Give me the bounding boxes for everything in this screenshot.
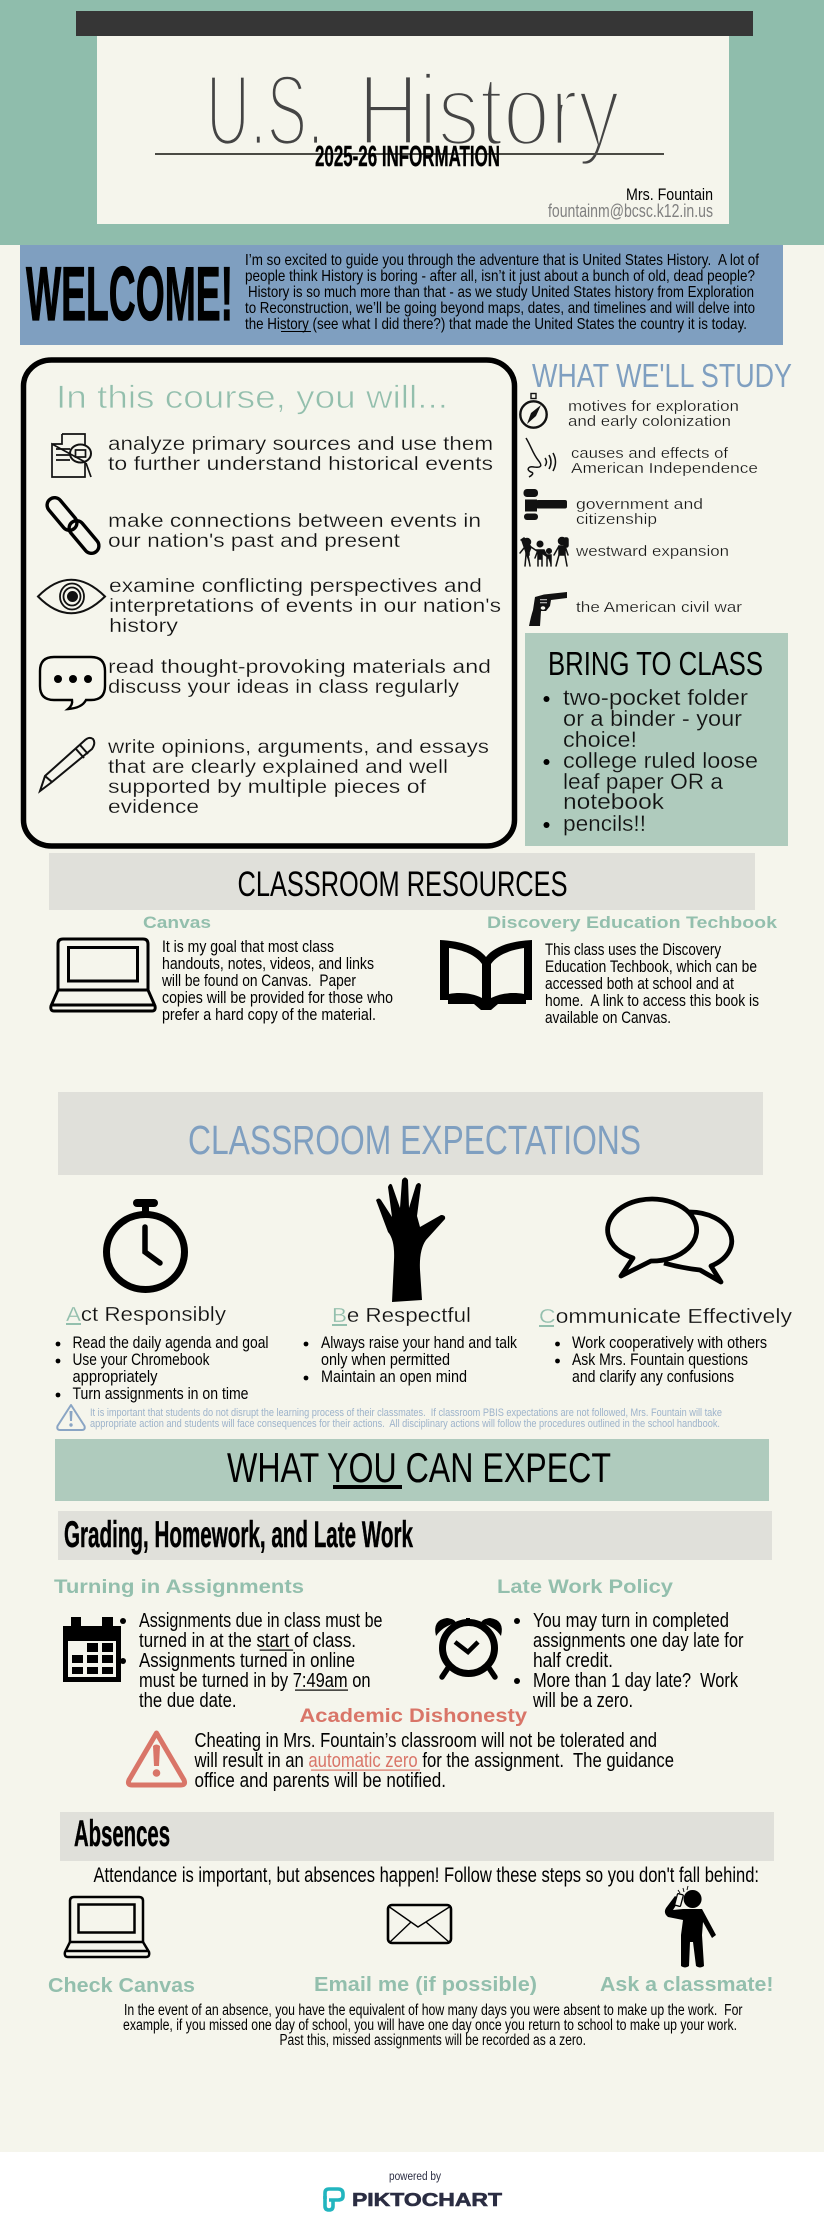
icon: nose and sound waves (526, 438, 556, 477)
text: exploration (568, 399, 739, 430)
text: government (576, 497, 703, 528)
column: communicate effectively (539, 1305, 793, 1386)
supplies list: choice! (563, 727, 637, 752)
icon: calendar (63, 1617, 121, 1682)
column: communicate effectively: Work cooperatively with others (572, 1333, 767, 1352)
column: communicate effectively: Ask Mrs. Fountain questions (572, 1350, 748, 1369)
canvas text: It is my goal that most class (162, 937, 334, 956)
column: be respectful: only when permitted (321, 1350, 450, 1369)
icon: envelope (388, 1905, 451, 1943)
text: connections: our nation's past and present (108, 531, 401, 552)
column: be respectful: Maintain an open mind (321, 1367, 467, 1386)
icon: piktochart logo (325, 2189, 343, 2210)
turning in text: Assignments due in class must be (139, 1610, 382, 1632)
techbook text: Education Techbook, which can be (545, 957, 757, 976)
icon: alarm clock (435, 1618, 502, 1677)
step: check canvas: Check Canvas (48, 1975, 195, 1997)
section: classroom expectations (56, 1092, 793, 1430)
text: perspectives: interpretations of events in our nation's (109, 596, 501, 617)
supplies list: or a binder - your (563, 706, 742, 731)
text: analyze: to further understand historical events (108, 454, 493, 475)
footer (0, 2152, 824, 2232)
late work text: half credit. (533, 1650, 613, 1672)
academic dishonesty heading: Academic Dishonesty (300, 1706, 527, 1727)
welcome panel (20, 245, 783, 345)
make-up policy text (123, 2002, 742, 2049)
column: communicate effectively: and clarify any confusions (572, 1367, 734, 1386)
title: History (358, 55, 620, 167)
dishonesty text: Cheating in Mrs. Fountain’s classroom will not be tolerated and (194, 1730, 657, 1752)
column: act responsibly: appropriately (72, 1367, 158, 1386)
welcome paragraph (245, 252, 759, 333)
header banner (0, 0, 824, 245)
text: discuss: read thought-provoking materials and (108, 657, 491, 678)
text: perspectives (109, 576, 501, 637)
discovery subheading: Discovery Education Techbook (487, 913, 778, 932)
text: connections: make connections between events in (108, 511, 481, 532)
panel: bring to class (525, 633, 788, 846)
text: connections (108, 511, 481, 552)
icon: document with magnifier (52, 434, 91, 477)
icon: open book (440, 940, 532, 1010)
panel: what we'll study (520, 357, 792, 626)
text: westward: westward expansion (575, 544, 729, 560)
turning in subheading: Turning in Assignments (54, 1577, 304, 1598)
section: classroom resources (49, 853, 778, 1027)
text: discuss (108, 657, 491, 698)
techbook text: available on Canvas. (545, 1008, 671, 1027)
heading: CLASSROOM EXPECTATIONS (188, 1117, 641, 1163)
icon: laptop (65, 1897, 149, 1957)
techbook text: This class uses the Discovery (545, 940, 721, 959)
dishonesty text (194, 1730, 674, 1792)
text: independence: American Independence (571, 461, 758, 477)
supplies list: two-pocket folder (563, 685, 748, 710)
panel heading: In this course, you will... (56, 379, 448, 415)
late work text: assignments one day late for (533, 1630, 744, 1652)
supplies list: college ruled loose (563, 748, 758, 773)
title (206, 55, 620, 167)
step: email me: Email me (if possible) (314, 1974, 537, 1996)
make-up policy text: Past this, missed assignments will be recorded as a zero. (280, 2032, 586, 2049)
heading: Absences (74, 1813, 170, 1854)
title: U.S. (206, 55, 324, 167)
icon: family of pioneers (520, 538, 568, 566)
canvas text: handouts, notes, videos, and links (162, 954, 374, 973)
canvas text: prefer a hard copy of the material. (162, 1005, 376, 1024)
text: government: government and (576, 497, 703, 513)
dishonesty text: office and parents will be notified. (194, 1770, 446, 1792)
text: civil war: the American civil war (576, 600, 742, 616)
section: grading, homework, late work (54, 1511, 772, 1792)
column: communicate effectively: Communicate Effectively (539, 1305, 793, 1328)
banner: what you can expect: WHAT YOU CAN EXPECT (227, 1444, 611, 1491)
late work text: More than 1 day late? Work (533, 1670, 739, 1692)
text: perspectives: history (109, 616, 179, 637)
text: discuss: discuss your ideas in class regularly (108, 677, 460, 698)
text: perspectives: examine conflicting perspectives and (109, 576, 482, 597)
techbook text (545, 940, 759, 1027)
column: act responsibly: Use your Chromebook (72, 1350, 210, 1369)
welcome panel: WELCOME! (26, 252, 233, 337)
text: write (107, 737, 489, 818)
text: write: write opinions, arguments, and essays (107, 737, 489, 758)
text: government: citizenship (576, 512, 657, 528)
banner: what you can expect (55, 1439, 769, 1501)
column: act responsibly: Turn assignments in on time (72, 1384, 248, 1403)
techbook text: home. A link to access this book is (545, 991, 759, 1010)
turning in text: must be turned in by 7:49am on (139, 1670, 370, 1692)
heading: BRING TO CLASS (548, 645, 763, 682)
icon: laptop (51, 939, 155, 1011)
icon: gavel (524, 489, 567, 520)
turning in text: Assignments turned in online (139, 1650, 355, 1672)
heading: CLASSROOM RESOURCES (238, 865, 568, 904)
icon: stopwatch (106, 1199, 184, 1290)
section: absences (48, 1812, 774, 2049)
subtitle: 2025-26 INFORMATION (315, 141, 500, 173)
techbook text: accessed both at school and at (545, 974, 734, 993)
icon: raised hand (376, 1178, 445, 1302)
icon: pencil (40, 738, 94, 791)
text: independence (571, 446, 758, 477)
text: write: evidence (108, 797, 199, 818)
text: analyze: analyze primary sources and use them (108, 434, 493, 455)
column: be respectful: Be Respectful (332, 1304, 471, 1327)
teacher name: Mrs. Fountain (626, 185, 713, 204)
column: be respectful (304, 1304, 517, 1386)
icon: revolver (529, 592, 567, 626)
icon: speech bubble (40, 657, 105, 709)
turning in text: turned in at the start of class. (139, 1630, 356, 1652)
icon: eye (38, 580, 105, 613)
late work text: will be a zero. (532, 1690, 633, 1712)
consequences note (90, 1407, 722, 1430)
supplies list: pencils!! (563, 811, 646, 836)
text: exploration: and early colonization (568, 414, 731, 430)
column: act responsibly (56, 1303, 268, 1403)
supplies list (544, 685, 758, 836)
late work text (514, 1610, 744, 1712)
text: write: supported by multiple pieces of (108, 777, 427, 798)
consequences note: appropriate action and students will face consequences for their actions. All disciplinary actions will follow the procedures outlined in the school handbook. (90, 1418, 720, 1430)
turning in text: the due date. (139, 1690, 236, 1712)
teacher email: fountainm@bcsc.k12.in.us (548, 201, 713, 221)
powered by: powered by (389, 2171, 441, 2183)
icon: red warning triangle (128, 1733, 185, 1785)
icon: compass (520, 394, 547, 428)
canvas text: will be found on Canvas. Paper (161, 971, 356, 990)
icon: speech bubbles (608, 1199, 732, 1282)
turning in text (120, 1610, 382, 1712)
column: be respectful: Always raise your hand and talk (321, 1333, 517, 1352)
column: act responsibly: Read the daily agenda and goal (72, 1333, 268, 1352)
panel: in this course (24, 360, 514, 846)
icon: caution triangle (57, 1405, 85, 1430)
step: ask a classmate: Ask a classmate! (600, 1974, 774, 1996)
icon: chain link (44, 495, 102, 556)
supplies list: leaf paper OR a (563, 769, 724, 794)
consequences note: It is important that students do not disrupt the learning process of their classmates. If classroom PBIS expectations are not followed, Mrs. Fountain will take (90, 1407, 722, 1419)
text: independence: causes and effects of (571, 446, 729, 462)
piktochart wordmark: PIKTOCHART (352, 2189, 503, 2210)
late work subheading: Late Work Policy (497, 1577, 673, 1598)
text: write: that are clearly explained and well (108, 757, 448, 778)
text: exploration: motives for exploration (568, 399, 739, 415)
late work text: You may turn in completed (533, 1610, 729, 1632)
canvas text (161, 937, 393, 1024)
icon: person on phone (665, 1886, 716, 1968)
canvas text: copies will be provided for those who (162, 988, 393, 1007)
heading: Grading, Homework, and Late Work (64, 1514, 413, 1555)
canvas subheading: Canvas (143, 913, 211, 932)
text: analyze (108, 434, 493, 475)
column: act responsibly: Act Responsibly (66, 1303, 227, 1326)
supplies list: notebook (563, 789, 665, 814)
dishonesty text: will result in an automatic zero for the assignment. The guidance (194, 1750, 674, 1772)
